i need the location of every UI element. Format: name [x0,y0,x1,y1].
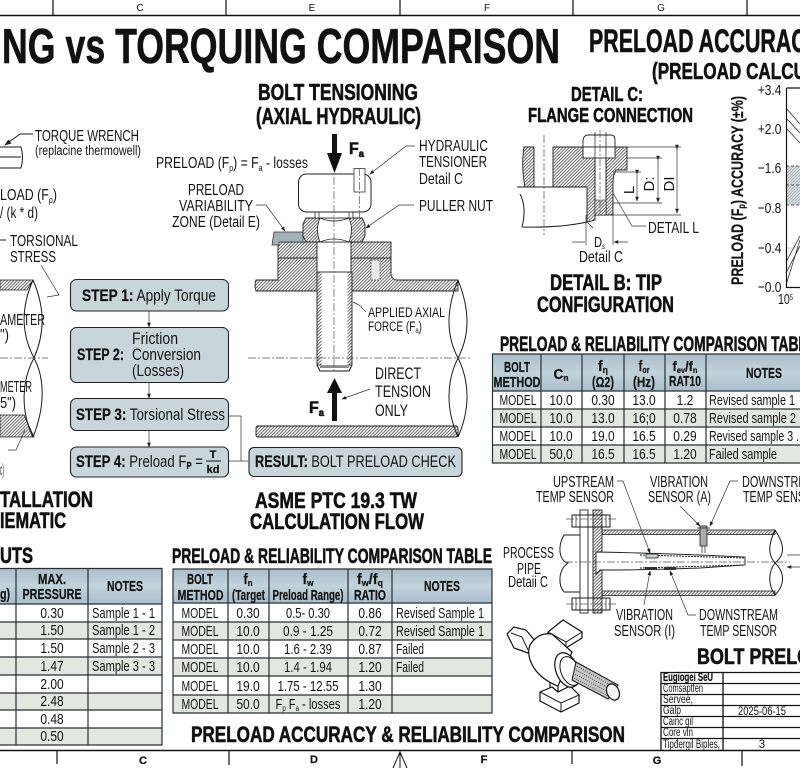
icon: threaded bolt isometric [507,620,622,712]
table: inputs: MAX. [38,572,66,588]
collar rings [550,649,584,691]
title block: 3 [759,739,765,751]
bracket plate [550,640,558,694]
table: preload and reliability comparison: RATIO [354,588,386,604]
tick labels: −1.6 [758,160,781,176]
table: bolt method comparison: MODEL [500,446,536,463]
bottom ruler with zone letters: C [139,755,147,767]
table: inputs: Sample 2 - 3 [92,640,155,657]
icon: torque wrench: TORQUE WRENCH [35,128,139,145]
table: preload and reliability comparison: 1.30 [358,678,382,694]
step 4: T [210,449,217,461]
torsional stress label [0,233,78,297]
torsional stress label: STRESS [10,249,56,266]
table: preload and reliability comparison: MODEL [182,605,218,622]
table: bolt method comparison: METHOD [494,375,540,391]
label: direct tension only [342,364,431,420]
table: inputs: 0.48 [40,711,64,727]
arrow [148,431,150,447]
table: preload and reliability comparison: METHOD [178,588,224,604]
title: NG vs TORQUING COMPARISON [2,20,560,74]
preload formula label: LOAD (F [0,187,61,204]
heading: preload accuracy [589,23,800,84]
table: bolt method comparison: NOTES [746,366,782,382]
threaded shaft [572,662,618,699]
table: bolt method comparison [492,354,800,463]
table: preload and reliability comparison: MODEL [182,641,218,658]
top ruler with zone letters: G [657,3,665,14]
table: bolt method comparison: MODEL [500,428,536,445]
arrow [148,311,150,327]
formula: preload: ) = F [233,155,259,172]
hex end [507,627,536,653]
top ruler with zone letters [0,0,800,16]
table: bolt method comparison: 16.5 [591,446,615,462]
heading: detail B: CONFIGURATION [537,292,674,317]
formula: preload: PRELOAD (F [156,155,249,172]
heading: detail C: DETAIL C: [571,84,643,106]
table: bolt method comparison: f [672,359,677,374]
label: upstream temp sensor [536,474,650,553]
table: bolt method comparison: or [642,365,650,375]
table: inputs: 0.30 [40,605,64,621]
panel: sensor installation diagram [503,474,800,640]
heading: detail C: FLANGE CONNECTION [528,105,693,127]
table: inputs: NOTES [107,579,143,595]
icon: torque wrench [0,128,141,168]
label: process pipe: Detaii C [508,574,548,591]
tick labels: +3.4 [758,82,782,98]
heading: calculation flow: ASME PTC 19.3 TW [255,488,417,513]
bottom ruler with zone letters: G [653,755,661,767]
axes [786,88,800,288]
label: puller nut [366,198,493,228]
top ruler with zone letters: E [309,3,316,14]
label: Fa top: F [349,139,359,158]
table: bolt method comparison: ev [677,366,686,375]
heading: installation schematic: TALLATION [0,487,93,512]
chart: preload accuracy [728,82,800,308]
flange section drawing [517,130,681,251]
table: preload and reliability comparison: q [378,578,383,588]
heading: center table: PRELOAD & RELIABILITY COMPARISON TABLE [172,545,492,568]
label: preload variability zone [172,182,285,231]
table: bolt method comparison: 10.0 [549,410,573,426]
preload formula label [0,187,57,222]
table: preload and reliability comparison: 0.5- 0.30 [286,605,330,622]
table: bolt method comparison: 16;0 [632,410,656,426]
icon: torque wrench: (replacine thermowell) [35,143,141,158]
table: bolt method comparison: f [638,359,643,375]
table: preload and reliability comparison: p [282,704,286,713]
table: preload and reliability comparison [173,569,492,713]
label: Fa bottom: F [309,398,319,417]
step 2 [70,328,228,382]
title block [661,672,800,751]
flange section drawing: DI [661,176,678,192]
dotted insert [371,260,380,280]
pipe section: 5") [0,395,16,412]
table: bolt method comparison: Failed sample [709,446,777,463]
label: hydraulic tensioner [370,138,488,188]
step 3 [70,398,228,430]
table: bolt method comparison: 10.0 [549,392,573,408]
table: inputs: g) [0,587,10,603]
title block: 2025-06-15 [738,706,786,718]
heading: bottom caption: PRELOAD ACCURACY & RELIABILITY COMPARISON [191,722,625,747]
step 1 [70,280,228,311]
top ruler with zone letters: F [484,3,490,14]
table: bolt method comparison: 0.29 [673,428,697,444]
table: bolt method comparison: η [603,365,608,375]
label: vibration sensor A: VIBRATION [650,474,708,491]
shaded band [786,166,800,205]
title block: Serveé, [663,694,693,706]
table: bolt method comparison: (Ω2) [592,375,614,391]
table: preload and reliability comparison: n [248,578,252,588]
table: bolt method comparison: 19.0 [591,428,615,444]
table: preload and reliability comparison: 1.75 - 12.55 [278,678,338,695]
pipe section [0,280,48,479]
label: downstream temp sensor top [710,474,800,526]
title block: Core vln [663,727,693,739]
flange section drawing: D: [641,176,658,192]
label: process pipe: PIPE [517,561,541,578]
table: bolt method comparison: 13.0 [591,410,615,426]
title block: Galp [663,705,681,717]
table: bolt method comparison: 16.5 [632,446,656,462]
heading: calculation flow [250,488,424,534]
label: Fa bottom: a [319,408,324,419]
label: vibration sensor I: VIBRATION [616,607,673,624]
flange section drawing: s [602,242,605,251]
table: inputs: Sample 1 - 2 [92,622,155,639]
table: preload and reliability comparison: F [286,696,296,713]
label: detail C: Detail C [579,249,623,266]
table: bolt method comparison: 50,0 [549,446,573,462]
table: preload and reliability comparison: f [302,572,307,588]
pipe and flange [560,510,790,613]
label: hydraulic tensioner: Detail C [419,171,463,188]
body cylinder [529,634,572,686]
table: inputs: PRESSURE [22,587,82,603]
step 3: STEP 3: Torsional Stress [76,405,225,424]
result box [249,448,462,476]
pipe section: ") [0,327,9,344]
label: preload variability zone: PRELOAD [188,182,244,199]
table: preload and reliability comparison: w [306,578,314,588]
bracket top [548,620,582,648]
table: preload and reliability comparison: MODEL [182,659,218,676]
connector to result [229,416,248,461]
table: preload and reliability comparison: 19.0 [236,678,260,694]
title block: Comsaptfen [663,683,703,695]
panel: detail C flange connection [517,84,699,317]
arrow: applied force down [327,134,342,173]
formula: preload: a [259,163,263,173]
diagram: axial hydraulic bolt section [248,134,470,437]
label: direct tension only: ONLY [375,401,408,420]
table: preload and reliability comparison: Failed [396,659,424,676]
table: bolt method comparison: f [598,359,603,375]
preload formula label: ρ [49,195,53,205]
table: preload and reliability comparison: 50.0 [236,696,260,712]
table: preload and reliability comparison: 1.20 [358,659,382,675]
label: Fa top: a [359,149,364,160]
table: preload and reliability comparison: 1.4 - 1.94 [284,659,332,676]
table: preload and reliability comparison: 1.6 - 2.39 [284,641,332,658]
label: preload variability zone: ZONE (Detail E) [172,214,260,231]
table: preload and reliability comparison: F [276,696,285,713]
flange section drawing: L [621,186,638,194]
arrow [148,382,150,398]
table: bolt method comparison: (Hz) [633,375,655,391]
table: bolt method comparison: /f [685,359,693,374]
table: bolt method comparison: 1.20 [673,446,697,462]
heading: detail C [528,84,693,127]
table: preload and reliability comparison: /f [369,572,378,588]
arrows: flow [787,555,800,567]
tick labels: +2.0 [758,121,782,137]
tick labels [758,82,793,308]
label: applied axial force: APPLIED AXIAL [368,305,445,320]
step 2: (Losses) [132,361,184,380]
y-axis title: p [737,204,748,209]
step 4: kd [207,464,219,476]
heading: bolt tensioning [256,79,421,129]
neck [315,212,353,218]
table: bolt method comparison: C [554,367,564,383]
table: inputs: 1.50 [40,622,64,638]
label: applied axial force: a [415,326,419,335]
label: downstream temp sensor bottom [670,571,778,640]
table: inputs [0,568,162,745]
heading: detail B: DETAIL B: TIP [550,270,662,295]
tapered shim [272,232,303,245]
label: vibration sensor I: SENSOR (I) [614,623,675,640]
torsional stress label: TORSIONAL [10,233,78,250]
label: puller nut: PULLER NUT [419,198,493,215]
label: hydraulic tensioner: TENSIONER [419,154,487,171]
title block: Cainc gil [663,716,693,728]
tick labels: −0.0 [758,279,782,295]
pipe and flange hatching [255,258,458,291]
tick labels: −0.8 [758,200,781,216]
top ruler with zone letters: C [136,3,144,14]
table: preload and reliability comparison: MODEL [182,623,218,640]
table: preload and reliability comparison: - losses [299,696,340,713]
label: applied axial force [353,302,445,335]
table: preload and reliability comparison: MODEL [182,696,218,713]
table: bolt method comparison: MODEL [500,410,536,427]
label: detail L: DETAIL L [648,220,699,237]
label: applied axial force: ) [419,319,422,334]
table: preload and reliability comparison: w [361,578,370,588]
tensioner head [298,174,371,212]
label: applied axial force: FORCE (F [368,319,432,334]
table: bolt method comparison: 10.0 [549,428,573,444]
panel: torque installation schematic [0,128,141,533]
formula: preload: - losses [263,155,308,172]
table: preload and reliability comparison: f [357,572,362,588]
shank [317,272,352,365]
table: preload and reliability comparison: 10.0 [236,623,260,639]
label: vibration sensor A [648,474,711,526]
label: process pipe [503,545,554,591]
table: preload and reliability comparison: Failed [396,641,424,658]
label: hydraulic tensioner: HYDRAULIC [419,138,488,155]
heading: calculation flow: CALCULATION FLOW [250,509,424,534]
table: bolt method comparison: RAT10 [669,374,701,390]
table: preload and reliability comparison: 1.20 [358,696,382,712]
bottom ruler with zone letters [0,750,800,768]
y-axis title: ) ACCURACY (±%) [728,96,747,204]
table: preload and reliability comparison: NOTES [424,579,460,595]
formula: preload: p [229,163,233,173]
puller nut [303,218,365,242]
table: bolt method comparison: 0.30 [591,392,615,408]
tick labels: 5 [790,293,793,302]
heading: bolt tensioning: (AXIAL HYDRAULIC) [256,103,421,129]
table: bolt method comparison: 13.0 [632,392,656,408]
label: upstream temp sensor: UPSTREAM [553,474,614,491]
tick labels: −0.4 [758,240,782,256]
table: bolt method comparison: BOLT [504,360,530,376]
curves [786,108,800,285]
step 1: STEP 1: Apply Torque [82,286,216,305]
label: direct tension only: DIRECT [375,364,421,383]
table: preload and reliability comparison: 0.72 [358,623,382,639]
table: preload and reliability comparison: 0.86 [358,605,382,621]
table: bolt method comparison: 16.5 [632,428,656,444]
label: preload variability zone: VARIABILITY [179,198,253,215]
flange section drawing: D [594,234,605,251]
heading: detail B [537,270,674,317]
table: inputs: 2.00 [40,676,64,692]
pipe section: c) [0,462,4,479]
pipe section: METER [0,379,32,396]
thermowell [596,552,745,574]
step 4: STEP 4: Preload F [76,452,204,471]
preload formula label: / (k * d) [0,205,38,222]
table: preload and reliability comparison: 0.87 [358,641,382,657]
table: inputs: Sample 3 - 3 [92,658,155,675]
heading: inputs table: UTS [0,543,33,568]
table: preload and reliability comparison: Revised Sample 1 [396,605,484,622]
heading: bolt tensioning: BOLT TENSIONING [258,79,418,105]
table: preload and reliability comparison: a [296,704,299,713]
step 2: Friction [132,329,178,348]
label: direct tension only: TENSION [375,382,431,401]
panel: torquing flow steps [70,280,248,477]
pipe section: AMETER [0,312,45,329]
result box: RESULT: BOLT PRELOAD CHECK [255,452,456,471]
step 2: Conversion [132,345,201,364]
table: preload and reliability comparison: MODEL [182,678,218,695]
foot [540,686,579,712]
heading: installation schematic: IEMATIC [0,508,66,533]
step 4 [70,447,228,477]
table: preload and reliability comparison: f [244,572,248,588]
table: bolt method comparison: n [693,366,698,375]
table: preload and reliability comparison: 0.9 - 1.25 [283,623,333,640]
table: preload and reliability comparison: (Target [232,588,265,604]
table: inputs: Sample 1 - 1 [92,605,155,622]
label: vibration sensor A: SENSOR (A) [648,489,711,506]
heading: installation schematic [0,487,93,533]
label: process pipe: PROCESS [503,545,554,562]
table: inputs: 2.48 [40,693,64,709]
arrow: reaction force up [327,378,342,421]
table: bolt method comparison: n [563,373,568,383]
step 4: P [186,461,192,472]
label: vibration sensor I [614,571,675,640]
table: bolt method comparison: 1.2 [677,392,693,408]
preload formula label: ) [53,187,57,204]
table: preload and reliability comparison: 10.0 [236,641,260,657]
table: inputs: 0.50 [40,728,64,744]
step 2: STEP 2: [77,345,124,364]
title block: Eugiogei SeU [663,672,713,684]
table: bolt method comparison: MODEL [500,392,536,409]
bottom ruler with zone letters: F [481,754,488,766]
table: preload and reliability comparison: 10.0 [236,659,260,675]
table: preload and reliability comparison: Revised Sample 1 [396,623,484,640]
table: preload and reliability comparison: 0.30 [236,605,260,621]
table: preload and reliability comparison: Preload Range) [272,588,344,604]
y-axis title: PRELOAD (F [728,181,747,285]
bottom ruler with zone letters: D [310,754,318,766]
table: inputs: 1.47 [40,658,64,674]
step 4: = [192,452,203,471]
title block: Tipđergil Biples, [663,739,720,751]
tick labels: 10 [778,291,795,308]
table: bolt method comparison: 0.78 [673,410,697,426]
table: preload and reliability comparison: BOLT [187,572,213,588]
label: upstream temp sensor: TEMP SENSOR [536,489,614,506]
table: inputs: 1.50 [40,640,64,656]
